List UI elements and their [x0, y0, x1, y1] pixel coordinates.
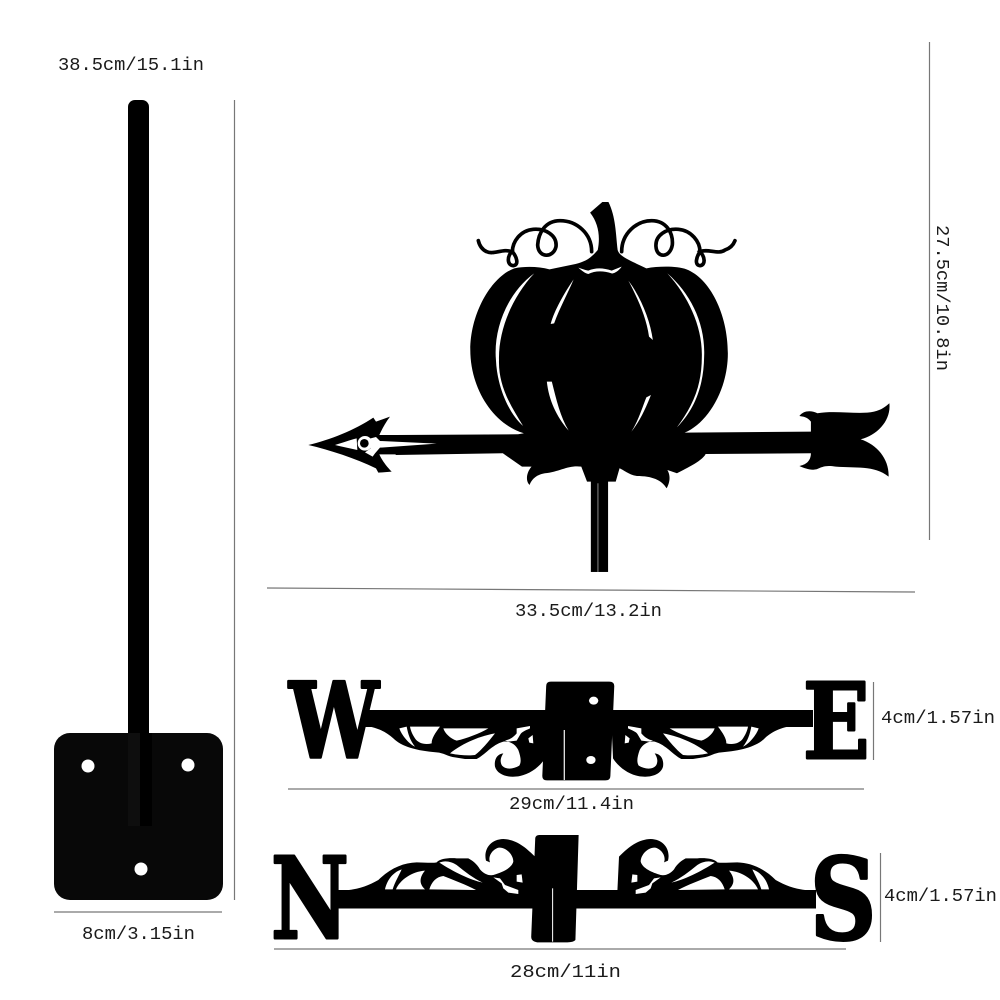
- letter S: S: [810, 835, 876, 966]
- pumpkin weathervane: [308, 202, 890, 572]
- mast: [591, 480, 608, 572]
- pumpkin width label: 33.5cm/13.2in: [515, 602, 662, 622]
- north-south height label: 4cm/1.57in: [884, 887, 997, 907]
- west-east height dimension line: [872, 682, 874, 760]
- hinge plate: [531, 835, 579, 942]
- north-south width label: 28cm/11in: [510, 963, 621, 983]
- bar: [363, 710, 813, 727]
- letter W: W: [288, 660, 380, 782]
- west-east width label: 29cm/11.4in: [509, 795, 634, 815]
- pole and base plate: [54, 100, 223, 900]
- north-south width dimension line: [274, 948, 846, 950]
- pumpkin, bar and leaves silhouette: [396, 202, 890, 488]
- left ornament: [360, 720, 547, 777]
- west-east width dimension line: [288, 788, 864, 790]
- pumpkin ribs: [496, 273, 704, 432]
- north-south height dimension line: [880, 853, 882, 942]
- pole height dimension line: [234, 100, 236, 900]
- plate width dimension line: [54, 911, 222, 913]
- arrowhead: [308, 417, 437, 473]
- left ornament: [340, 839, 537, 894]
- right ornament: [617, 839, 814, 894]
- west-east direction bar: [288, 660, 870, 783]
- right curl: [622, 221, 735, 266]
- pumpkin height dimension line: [928, 42, 930, 540]
- letter N: N: [271, 834, 349, 965]
- letter E: E: [803, 661, 870, 783]
- top squiggle highlight: [578, 267, 622, 274]
- right ornament: [611, 720, 798, 777]
- pumpkin height label: 27.5cm/10.8in: [931, 225, 951, 371]
- pumpkin width dimension line: [267, 588, 915, 592]
- north-south direction bar: [271, 834, 876, 966]
- bar: [332, 890, 816, 908]
- plate width label: 8cm/3.15in: [82, 925, 195, 945]
- left curl: [478, 221, 592, 266]
- hinge plate: [542, 682, 614, 780]
- pole height label: 38.5cm/15.1in: [58, 56, 204, 76]
- west-east height label: 4cm/1.57in: [881, 709, 995, 729]
